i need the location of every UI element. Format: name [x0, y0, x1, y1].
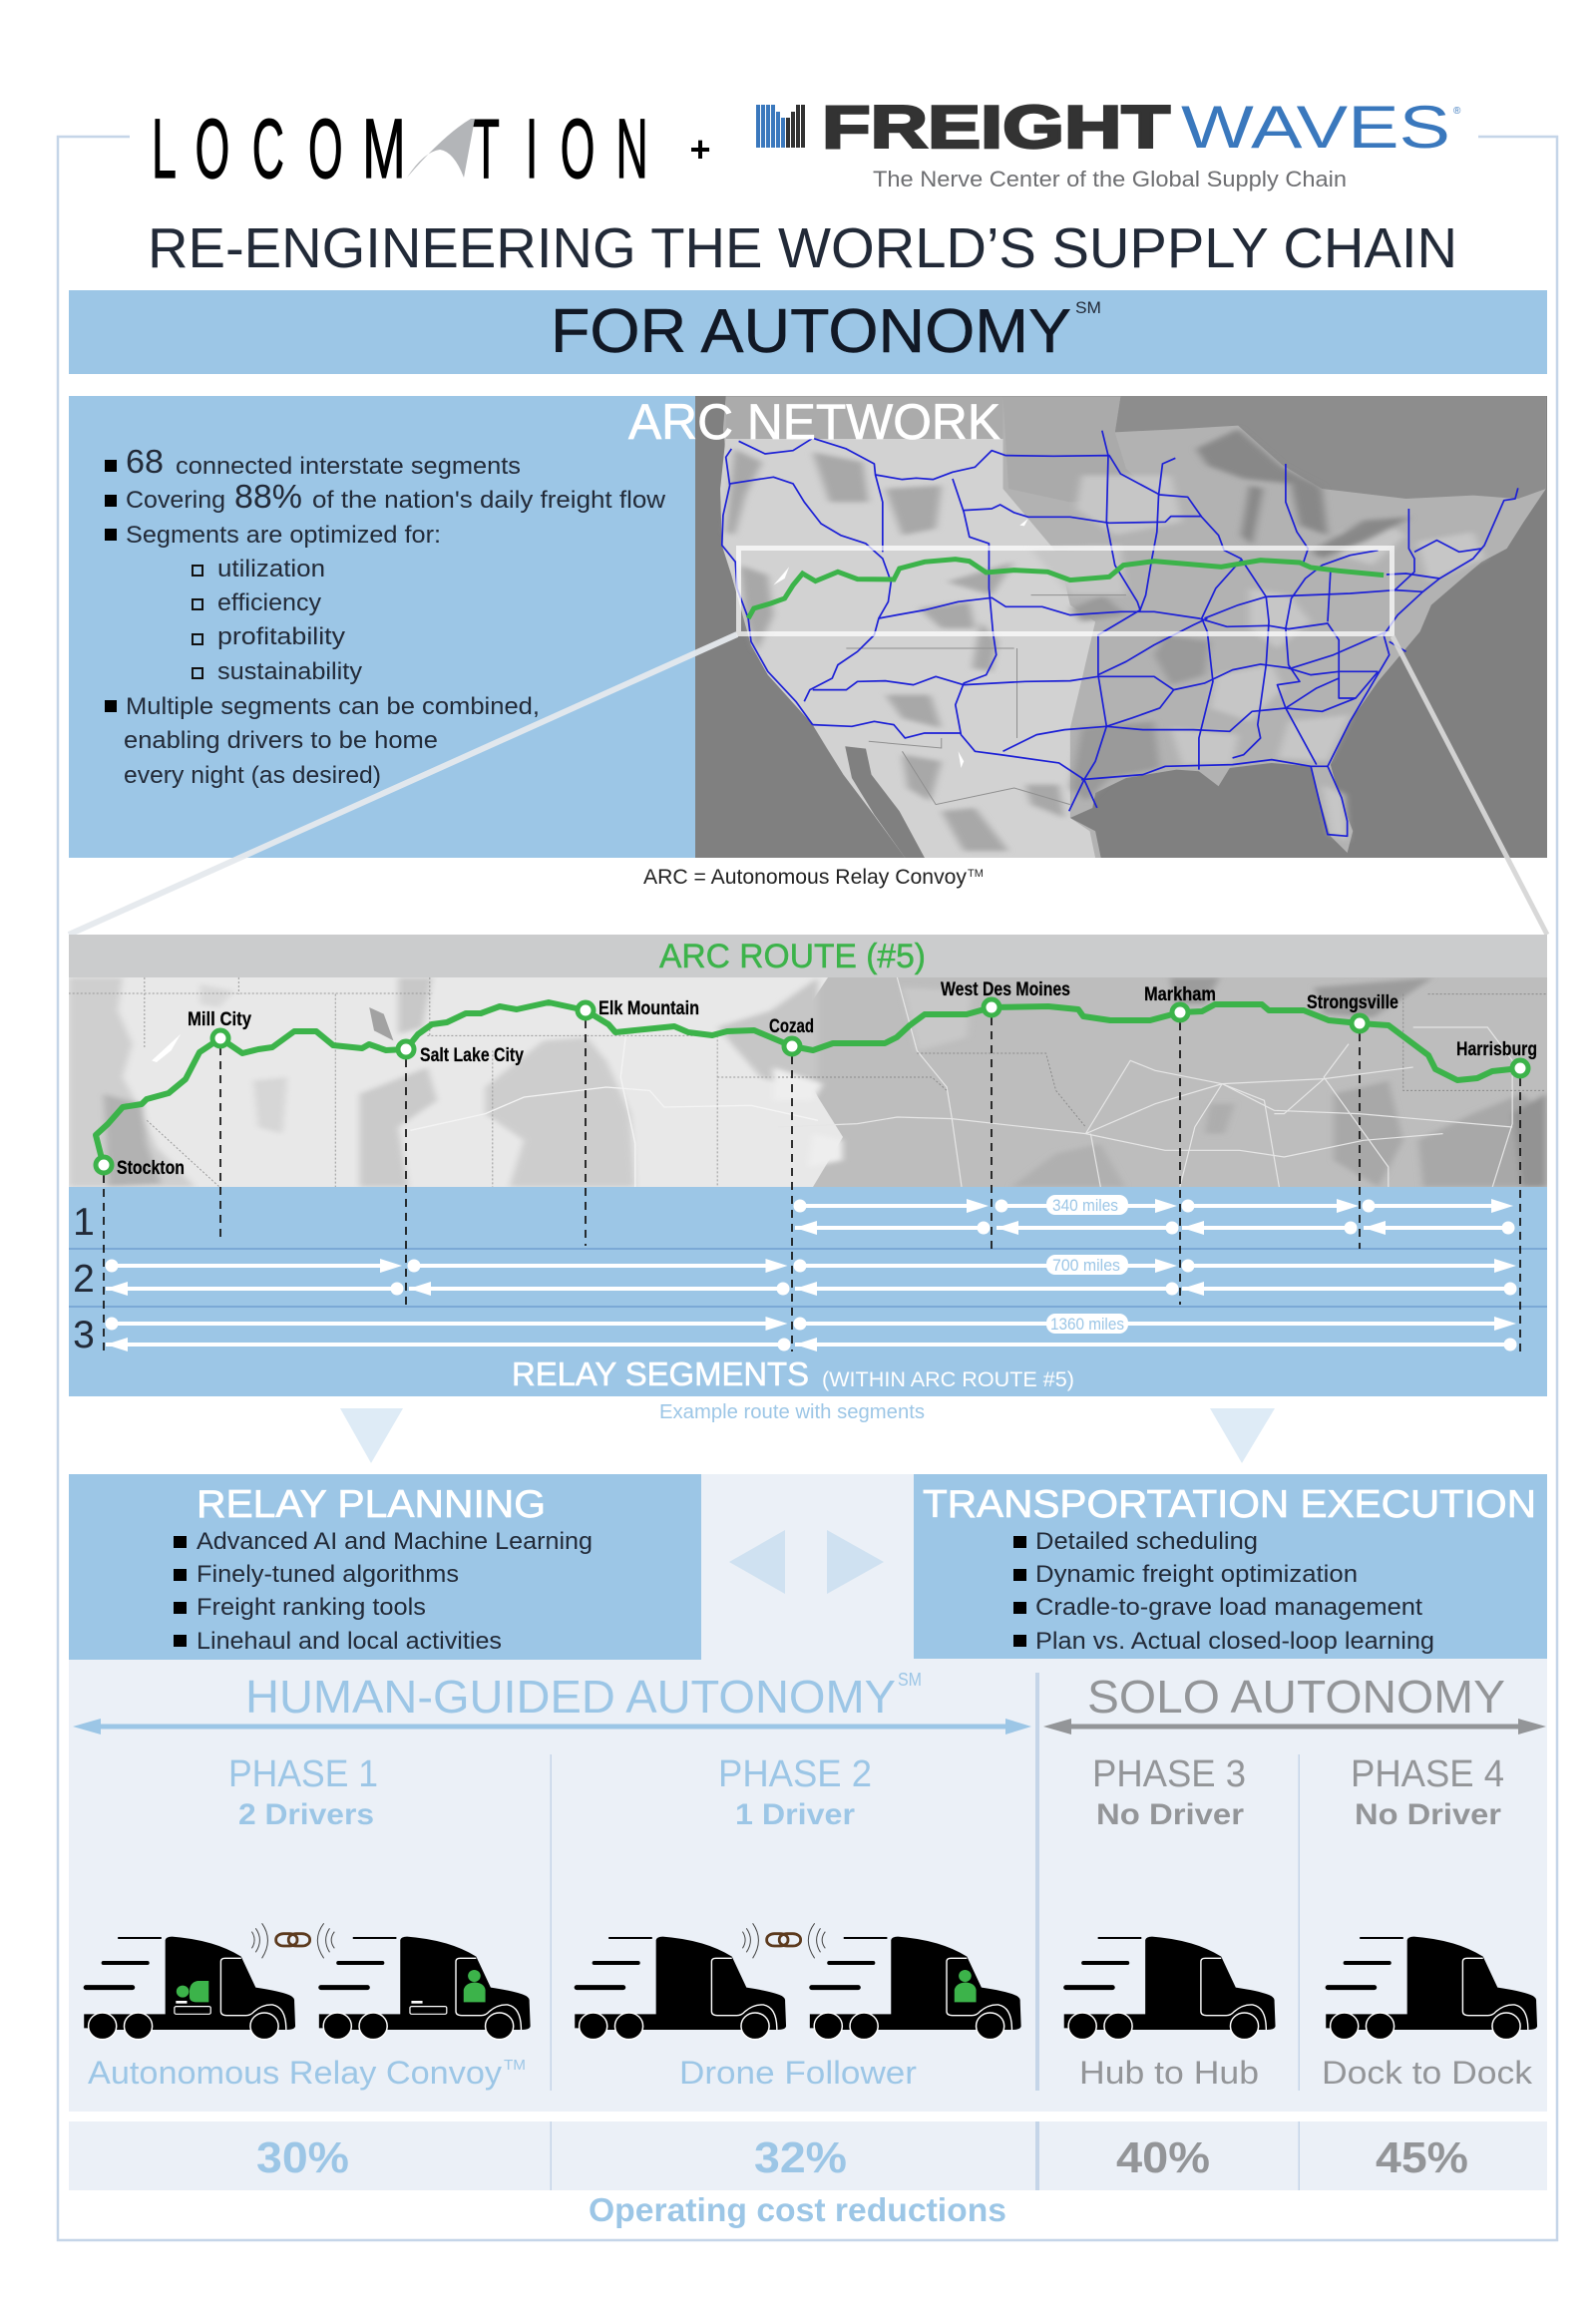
panel: ARC network text: every night (as desired) — [124, 762, 381, 789]
heading: ARC network: ARC NETWORK — [628, 394, 1000, 450]
driver counts: No Driver — [1096, 1798, 1244, 1831]
title band: for autonomy: FOR AUTONOMY — [551, 297, 1071, 366]
mileage labels: 700 miles — [1052, 1256, 1120, 1275]
stop labels: Stockton — [117, 1158, 185, 1179]
phase captions: Hub to Hub — [1079, 2055, 1259, 2091]
panel: ARC network text: of the nation's daily freight flow — [312, 487, 666, 514]
panel: ARC network text: sustainability — [217, 658, 362, 685]
phase captions: TM — [504, 2057, 526, 2074]
panel: transportation execution: Plan vs. Actual closed-loop learning — [1035, 1628, 1434, 1655]
logo: FreightWaves: FREIGHT — [822, 94, 1170, 161]
row numbers: 1 — [73, 1201, 95, 1244]
icon: convoy link phase 1 — [251, 1923, 334, 1958]
phase captions: Autonomous Relay Convoy — [88, 2055, 502, 2091]
panel: ARC network text — [69, 396, 695, 858]
panel: relay planning: Linehaul and local activities — [197, 1628, 502, 1655]
heading: relay segments: (WITHIN ARC ROUTE #5) — [822, 1368, 1074, 1391]
logo: FreightWaves: WAVES — [1181, 94, 1450, 161]
driver counts: 1 Driver — [735, 1798, 855, 1831]
arrow: down left — [340, 1408, 403, 1463]
panel: percentage strip: 40% — [1116, 2133, 1210, 2182]
gulf of California — [845, 746, 925, 858]
icon: truck phase 2 follower — [810, 1937, 1021, 2040]
phase dividers — [551, 1673, 1300, 2091]
logo: FreightWaves: ® — [1453, 106, 1461, 117]
panel: relay planning: Freight ranking tools — [197, 1594, 426, 1621]
panel: transportation execution — [914, 1474, 1547, 1659]
icon: truck phase 4 — [1326, 1937, 1537, 2040]
panel: percentage strip: 32% — [754, 2133, 847, 2182]
panel: ARC route band: ARC ROUTE (#5) — [659, 938, 926, 975]
logo: Locomation: LOCO — [152, 103, 343, 196]
caption: operating cost reductions: Operating cost reductions — [589, 2191, 1006, 2228]
icon: convoy link phase 2 — [742, 1923, 825, 1958]
stop labels: Markham — [1144, 984, 1216, 1005]
icon: truck phase 2 lead — [575, 1937, 786, 2040]
logo: Locomation: M — [362, 102, 406, 195]
phase captions: Dock to Dock — [1322, 2055, 1533, 2091]
logo: Locomation: TION — [473, 103, 648, 196]
panel: relay planning: RELAY PLANNING — [197, 1483, 546, 1526]
panel: ARC network text: Covering — [126, 487, 225, 514]
panel: ARC network text: Segments are optimized for: — [126, 522, 441, 549]
panel: ARC network text: efficiency — [217, 589, 321, 616]
phase captions — [88, 2055, 1533, 2091]
panel: ARC route band — [69, 935, 1547, 977]
icon: truck phase 1 follower — [319, 1937, 531, 2040]
panel: percentage strip — [69, 2121, 1547, 2190]
icon: road A — [407, 119, 475, 178]
panel: relay segments background — [69, 1187, 1547, 1396]
heading: relay segments — [512, 1355, 1074, 1392]
land base — [720, 396, 1546, 858]
logo: Locomation — [152, 102, 648, 196]
phase headings: PHASE 3 — [1092, 1753, 1246, 1795]
phase headings: PHASE 4 — [1351, 1753, 1504, 1795]
title band: for autonomy — [69, 290, 1547, 374]
panel: transportation execution: TRANSPORTATION EXECUTION — [923, 1483, 1536, 1526]
panel: relay planning: Advanced AI and Machine Learning — [197, 1528, 593, 1555]
phase captions: Drone Follower — [679, 2055, 917, 2091]
caption: example route: Example route with segments — [659, 1401, 925, 1423]
highways — [722, 431, 1518, 836]
icon: truck phase 1 lead — [84, 1937, 295, 2040]
stop labels: Strongsville — [1307, 992, 1398, 1013]
stop labels: Elk Mountain — [598, 998, 699, 1019]
panel: percentage strip: 45% — [1376, 2133, 1468, 2182]
panel: percentage strip: 30% — [256, 2133, 349, 2182]
dashed stop lines — [104, 1017, 1520, 1354]
row numbers: 3 — [73, 1314, 95, 1356]
mileage labels: 340 miles — [1052, 1196, 1118, 1215]
icon: truck phase 3 — [1064, 1937, 1276, 2040]
panel: ARC network text: 68 — [126, 443, 164, 480]
heading: human-guided autonomy: HUMAN-GUIDED AUTONOMY — [245, 1671, 896, 1723]
plus sign: + — [689, 129, 711, 170]
heading: relay segments: RELAY SEGMENTS — [512, 1355, 809, 1392]
phase headings: PHASE 1 — [228, 1753, 378, 1795]
driver counts: 2 Drivers — [238, 1798, 374, 1831]
panel: relay planning: Finely-tuned algorithms — [197, 1561, 459, 1588]
panel: ARC network text: utilization — [217, 556, 325, 582]
phase headings — [228, 1753, 1504, 1795]
driver counts — [238, 1798, 1501, 1831]
icon: bars — [756, 105, 785, 148]
title band: for autonomy: SM — [1075, 298, 1101, 317]
panel: transportation execution: Detailed scheduling — [1035, 1528, 1258, 1555]
heading: human-guided autonomy: SM — [898, 1670, 922, 1690]
arrow: solo span — [1043, 1719, 1546, 1734]
Great Lakes — [1196, 429, 1411, 559]
note: ARC definition: ARC = Autonomous Relay Convoy — [643, 866, 967, 889]
stop labels: Salt Lake City — [420, 1045, 524, 1066]
heading: solo autonomy: SOLO AUTONOMY — [1087, 1671, 1505, 1723]
stop labels: West Des Moines — [941, 979, 1070, 1000]
panel: ARC network text: Multiple segments can be combined, — [126, 693, 540, 720]
note: ARC definition: TM — [968, 868, 984, 880]
route map terrain — [69, 977, 1547, 1187]
panel: ARC network text: 88% — [234, 478, 302, 515]
stop labels: Mill City — [188, 1009, 251, 1030]
phase headings: PHASE 2 — [718, 1753, 872, 1795]
panel: transportation execution: Dynamic freight optimization — [1035, 1561, 1358, 1588]
stop labels: Cozad — [769, 1016, 814, 1037]
logo: FreightWaves — [756, 94, 1461, 192]
terrain patches — [726, 449, 1064, 851]
title: RE-ENGINEERING THE WORLD’S SUPPLY CHAIN — [148, 216, 1457, 280]
stop labels: Harrisburg — [1456, 1039, 1537, 1060]
selection rectangle — [738, 549, 1393, 634]
panel: ARC network text: profitability — [217, 623, 345, 650]
connector lines — [69, 634, 1547, 935]
relay arrows — [106, 1199, 1516, 1351]
arrow: human-guided span — [73, 1719, 1031, 1734]
mileage labels: 1360 miles — [1050, 1315, 1124, 1334]
stop labels — [117, 979, 1537, 1179]
panel: ARC network text: connected interstate segments — [176, 453, 521, 480]
row numbers — [73, 1201, 95, 1356]
US network map — [695, 396, 1547, 858]
arrows: planning and execution exchange — [729, 1530, 884, 1594]
ARC route 5 on map — [748, 560, 1384, 618]
row numbers: 2 — [73, 1258, 95, 1301]
panel: relay planning — [69, 1474, 701, 1660]
panel: transportation execution: Cradle-to-grave load management — [1035, 1594, 1422, 1621]
arrow: down right — [1210, 1408, 1275, 1463]
green route with stops — [96, 999, 1528, 1173]
driver counts: No Driver — [1355, 1798, 1501, 1831]
logo: FreightWaves: The Nerve Center of the Global Supply Chain — [873, 167, 1347, 192]
panel: ARC network text: enabling drivers to be home — [124, 727, 438, 754]
mileage labels — [1046, 1195, 1128, 1334]
panel: pale background — [69, 1474, 1547, 2112]
